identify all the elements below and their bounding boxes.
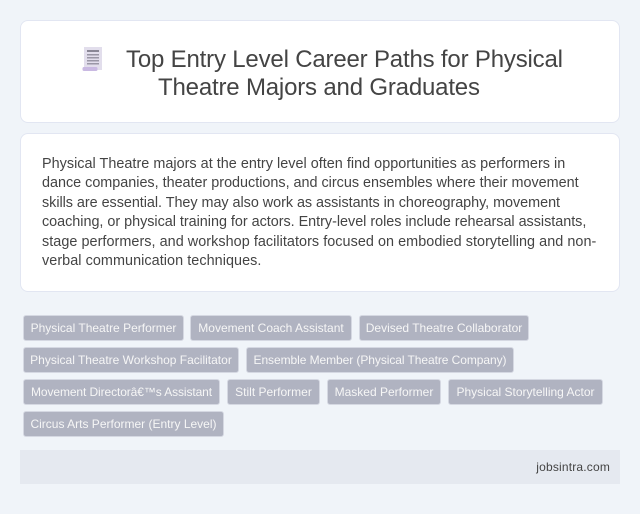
tag [359,315,529,341]
title: Theatre Majors and Graduates [158,74,480,101]
description text: verbal communication techniques. [42,253,262,269]
tag: Masked Performer [335,385,433,399]
description text: dance companies, theater productions, and circus ensembles where their movement [42,175,579,191]
tag [23,347,239,373]
tag [190,315,352,341]
tag [448,379,603,405]
description text: stage performers, and workshop facilitators focused on embodied storytelling and non- [42,234,596,250]
tag: Devised Theatre Collaborator [366,321,522,335]
header panel [20,20,620,123]
tag [227,379,320,405]
description text: skills are essential. They may also work as assistants in choreography, movement [42,195,560,211]
tag [246,347,514,373]
tag: Physical Storytelling Actor [456,385,595,399]
tag: Stilt Performer [235,385,312,399]
tag: Physical Theatre Performer [31,321,176,335]
tag: Ensemble Member (Physical Theatre Company) [254,353,506,367]
tag: Movement Directorâ€™s Assistant [31,385,212,399]
title [126,46,563,101]
tag [23,315,184,341]
tag [23,379,220,405]
description text: Physical Theatre majors at the entry level often find opportunities as performers in [42,156,565,172]
tag [23,411,224,437]
footer source text: jobsintra.com [536,460,610,474]
tag: Circus Arts Performer (Entry Level) [30,417,217,431]
description panel [20,133,620,292]
title: Top Entry Level Career Paths for Physical [126,46,563,73]
tag: Movement Coach Assistant [198,321,344,335]
tag [327,379,441,405]
icon: document scroll [82,47,102,71]
tag: Physical Theatre Workshop Facilitator [30,353,232,367]
footer bar [20,450,620,484]
description text [42,156,596,269]
description text: coaching, or physical training for actors. Entry-level roles include rehearsal assistants, [42,214,586,230]
career tags [23,315,603,437]
